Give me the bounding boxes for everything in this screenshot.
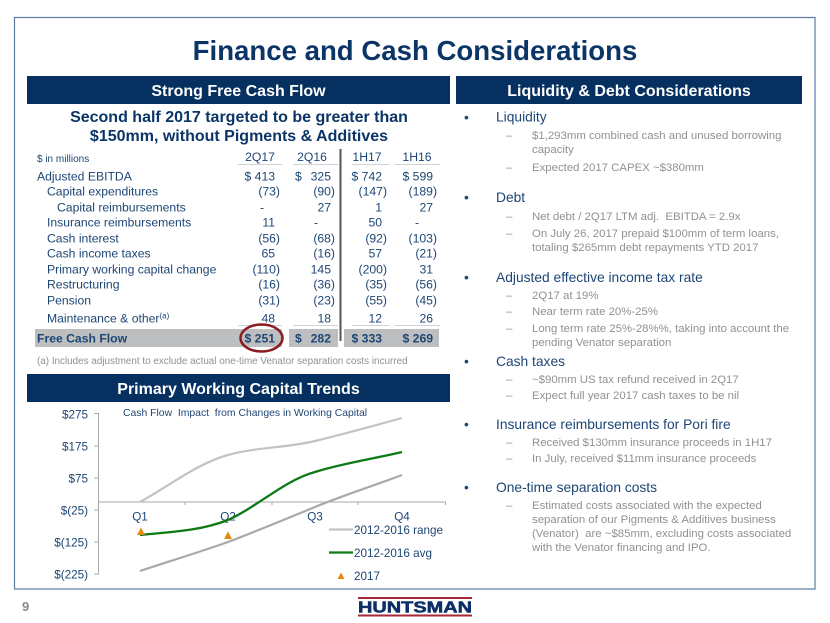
text block: cash taxes <box>464 354 739 402</box>
text block: adjusted effective income tax rate: – <box>506 306 513 318</box>
text block: adjusted effective income tax rate: 2Q17 at 19% <box>532 290 598 302</box>
row highlight: free cash flow <box>35 329 439 347</box>
column: 1H16: 27 <box>419 200 433 214</box>
column: 1H16: 26 <box>419 312 433 326</box>
column: 2Q16: 145 <box>311 262 331 276</box>
column: 2Q17: $ 413 <box>244 170 275 184</box>
table: free cash flow <box>35 149 440 367</box>
y axis labels <box>54 408 88 582</box>
table header <box>37 150 440 326</box>
legend: 2012-2016 avg <box>354 547 432 560</box>
column: 2Q17: - <box>260 200 264 214</box>
table header: 2Q17 <box>245 150 275 164</box>
column: 1H16: (45) <box>415 294 437 308</box>
row: free cash flow: $ 269 <box>402 332 433 346</box>
text block: liquidity: $1,293mm combined cash and unused borrowing <box>532 130 781 142</box>
series: average <box>140 452 402 535</box>
panel: liquidity and debt considerations <box>456 76 802 554</box>
column: 1H17: $ 742 <box>352 170 382 184</box>
row: free cash flow: $ <box>295 332 302 346</box>
text block: liquidity <box>464 110 781 174</box>
text block: adjusted effective income tax rate: – <box>506 323 513 335</box>
chart title: Cash Flow Impact from Changes in Working Capital <box>123 408 367 419</box>
row labels <box>37 170 217 326</box>
row: free cash flow: $ 333 <box>352 332 382 346</box>
column: 2Q16: (16) <box>313 246 335 260</box>
text block: debt: totaling $265mm debt repayments YTD 2017 <box>532 242 758 254</box>
column: 1H16: - <box>415 216 419 230</box>
column: 1H16: 31 <box>419 262 433 276</box>
text block: adjusted effective income tax rate: • <box>464 270 469 285</box>
table header: 1H16 <box>402 150 432 164</box>
title: Finance and Cash Considerations <box>193 35 637 66</box>
column: 1H17: 57 <box>368 246 382 260</box>
x axis labels: Q2 <box>220 510 236 524</box>
heading: liquidity and debt considerations: Liquidity & Debt Considerations <box>507 83 751 100</box>
x axis labels: Q3 <box>307 510 323 524</box>
x axis labels: Q1 <box>132 510 148 524</box>
text block: cash taxes: ~$90mm US tax refund received in 2Q17 <box>532 374 739 386</box>
table header: 2Q16 <box>297 150 327 164</box>
text block: debt: – <box>506 211 513 223</box>
logo: huntsman: HUNTSMAN <box>358 600 472 616</box>
legend: 2017 <box>354 570 380 583</box>
series: range high <box>140 418 402 502</box>
page number: 9 <box>22 599 29 614</box>
text block: debt: Net debt / 2Q17 LTM adj. EBITDA = 2.9x <box>532 211 741 223</box>
table header: $ in millions <box>37 154 89 165</box>
column: 2Q16: 18 <box>317 312 331 326</box>
text block: insurance reimbursements: In July, received $11mm insurance proceeds <box>532 453 757 465</box>
text block: insurance reimbursements: – <box>506 453 513 465</box>
text block: one-time separation costs: separation of our Pigments & Additives business <box>532 514 776 526</box>
column: 2Q16: 325 <box>311 170 331 184</box>
column: 1H16: (21) <box>415 246 437 260</box>
column: 1H16: (189) <box>409 184 437 198</box>
chart: working capital line chart <box>54 408 446 583</box>
text block: second half target: $150mm, without Pigments & Additives <box>90 128 388 145</box>
column: 1H17: (35) <box>365 278 387 292</box>
column: 1H17: (92) <box>365 232 387 246</box>
text block: debt: Debt <box>496 190 525 205</box>
series: range low <box>140 475 402 571</box>
column: 1H17: (200) <box>359 262 387 276</box>
column: 2Q17: 65 <box>261 246 275 260</box>
panel: primary working capital trends <box>27 374 450 583</box>
text block: insurance reimbursements: – <box>506 437 513 449</box>
row: free cash flow <box>37 332 433 346</box>
y axis labels: $(25) <box>61 504 88 518</box>
column: 1H16 <box>402 170 437 326</box>
text block: insurance reimbursements: • <box>464 417 469 432</box>
column: 2Q17 <box>244 170 280 326</box>
footnote: (a) Includes adjustment to exclude actual one-time Venator separation costs incurred <box>37 356 408 367</box>
row labels: Insurance reimbursements <box>47 216 191 230</box>
text block: cash taxes: • <box>464 354 469 369</box>
column: 2Q17: (56) <box>258 232 280 246</box>
text block: debt: On July 26, 2017 prepaid $100mm of term loans, <box>532 228 779 240</box>
panel: strong free cash flow <box>27 76 450 367</box>
y axis labels: $(225) <box>54 568 88 582</box>
text block: one-time separation costs: with the Venator financing and IPO. <box>531 542 711 554</box>
heading: strong free cash flow: Strong Free Cash Flow <box>151 83 326 100</box>
text block: second half target <box>70 109 408 145</box>
column: 1H17: 12 <box>368 312 382 326</box>
text block: cash taxes: – <box>506 390 513 402</box>
heading: primary working capital trends <box>27 374 450 402</box>
row labels: Cash interest <box>47 232 119 246</box>
x axis labels <box>132 510 410 524</box>
row labels: Primary working capital change <box>47 262 217 276</box>
row: free cash flow: Free Cash Flow <box>37 332 128 346</box>
column: 2Q16: $ <box>295 170 302 184</box>
text block: insurance reimbursements <box>464 417 772 465</box>
row labels: Restructuring <box>47 278 119 292</box>
heading: strong free cash flow <box>27 76 450 104</box>
text block: cash taxes: – <box>506 374 513 386</box>
text block: cash taxes: Cash taxes <box>496 354 565 369</box>
text block: debt <box>464 190 779 254</box>
column: 2Q16 <box>295 170 335 326</box>
column: 1H17: (55) <box>365 294 387 308</box>
text block: adjusted effective income tax rate: Adjusted effective income tax rate <box>496 270 703 285</box>
y axis labels: $(125) <box>54 536 88 550</box>
row labels: Pension <box>47 294 91 308</box>
text block: one-time separation costs <box>464 480 791 554</box>
text block: insurance reimbursements: Insurance reimbursements for Pori fire <box>496 417 731 432</box>
column: 1H16: $ 599 <box>402 170 433 184</box>
column: 2Q17: (110) <box>252 262 280 276</box>
column: 2Q16: (36) <box>313 278 335 292</box>
column: 2Q17: 48 <box>261 312 275 326</box>
text block: one-time separation costs: Estimated costs associated with the expected <box>532 500 762 512</box>
column: 1H17: 1 <box>375 200 382 214</box>
text block: one-time separation costs: – <box>506 500 513 512</box>
column: 2Q17: (16) <box>258 278 280 292</box>
text block: adjusted effective income tax rate: – <box>506 290 513 302</box>
row labels: Cash income taxes <box>47 246 151 260</box>
text block: adjusted effective income tax rate: Long term rate 25%-28%%, taking into account the <box>532 323 789 335</box>
column: 2Q16: (90) <box>313 184 335 198</box>
row labels: Capital reimbursements <box>57 200 186 214</box>
text block: liquidity: – <box>506 130 513 142</box>
legend <box>329 524 443 583</box>
text block: adjusted effective income tax rate <box>464 270 789 349</box>
column: 2Q16: - <box>314 216 318 230</box>
text block: liquidity: – <box>506 162 513 174</box>
column: 2Q17: (73) <box>258 184 280 198</box>
row: free cash flow: 282 <box>311 332 331 346</box>
text block: one-time separation costs: • <box>464 480 469 495</box>
text block: adjusted effective income tax rate: Near term rate 20%-25% <box>532 306 658 318</box>
column: 1H17 <box>352 170 387 326</box>
column: 1H17: (147) <box>359 184 387 198</box>
text block: one-time separation costs: (Venator) are ~$85mm, excluding costs associated <box>532 528 791 540</box>
text block: cash taxes: Expect full year 2017 cash taxes to be nil <box>532 390 739 402</box>
text block: liquidity: Expected 2017 CAPEX ~$380mm <box>532 162 704 174</box>
y axis labels: $175 <box>62 440 88 454</box>
text block: adjusted effective income tax rate: pending Venator separation <box>532 337 671 349</box>
y axis labels: $275 <box>62 408 88 422</box>
x axis labels: Q4 <box>394 510 410 524</box>
column: 2Q16: 27 <box>317 200 331 214</box>
callout: circled 251 <box>240 324 282 352</box>
row labels: Capital expenditures <box>47 184 158 198</box>
column: 2Q16: (23) <box>313 294 335 308</box>
text block: debt: • <box>464 190 469 205</box>
heading: liquidity and debt considerations <box>456 76 802 104</box>
row labels: Maintenance & other <box>47 312 159 326</box>
text block: one-time separation costs: One-time separation costs <box>496 480 657 495</box>
text block: liquidity: Liquidity <box>496 110 547 124</box>
series: 2017 markers <box>137 528 232 539</box>
heading: primary working capital trends: Primary Working Capital Trends <box>117 381 360 398</box>
column: 2Q17: 11 <box>262 216 275 230</box>
text block: second half target: Second half 2017 targeted to be greater than <box>70 109 408 126</box>
column: 2Q17: (31) <box>258 294 280 308</box>
text block: debt: – <box>506 228 513 240</box>
row labels: (a) <box>159 312 170 320</box>
table header: 1H17 <box>352 150 382 164</box>
column: 2Q16: (68) <box>313 232 335 246</box>
legend: 2012-2016 range <box>354 524 443 537</box>
column: 1H16: (103) <box>409 232 437 246</box>
logo: huntsman <box>358 597 472 616</box>
text block: insurance reimbursements: Received $130mm insurance proceeds in 1H17 <box>532 437 772 449</box>
text block: liquidity: capacity <box>532 144 574 156</box>
row: free cash flow: $ 251 <box>244 332 275 346</box>
text block: liquidity: • <box>464 110 469 125</box>
column: 1H16: (56) <box>415 278 437 292</box>
row labels: Adjusted EBITDA <box>37 170 133 184</box>
y axis labels: $75 <box>68 472 88 486</box>
column: 1H17: 50 <box>368 216 382 230</box>
